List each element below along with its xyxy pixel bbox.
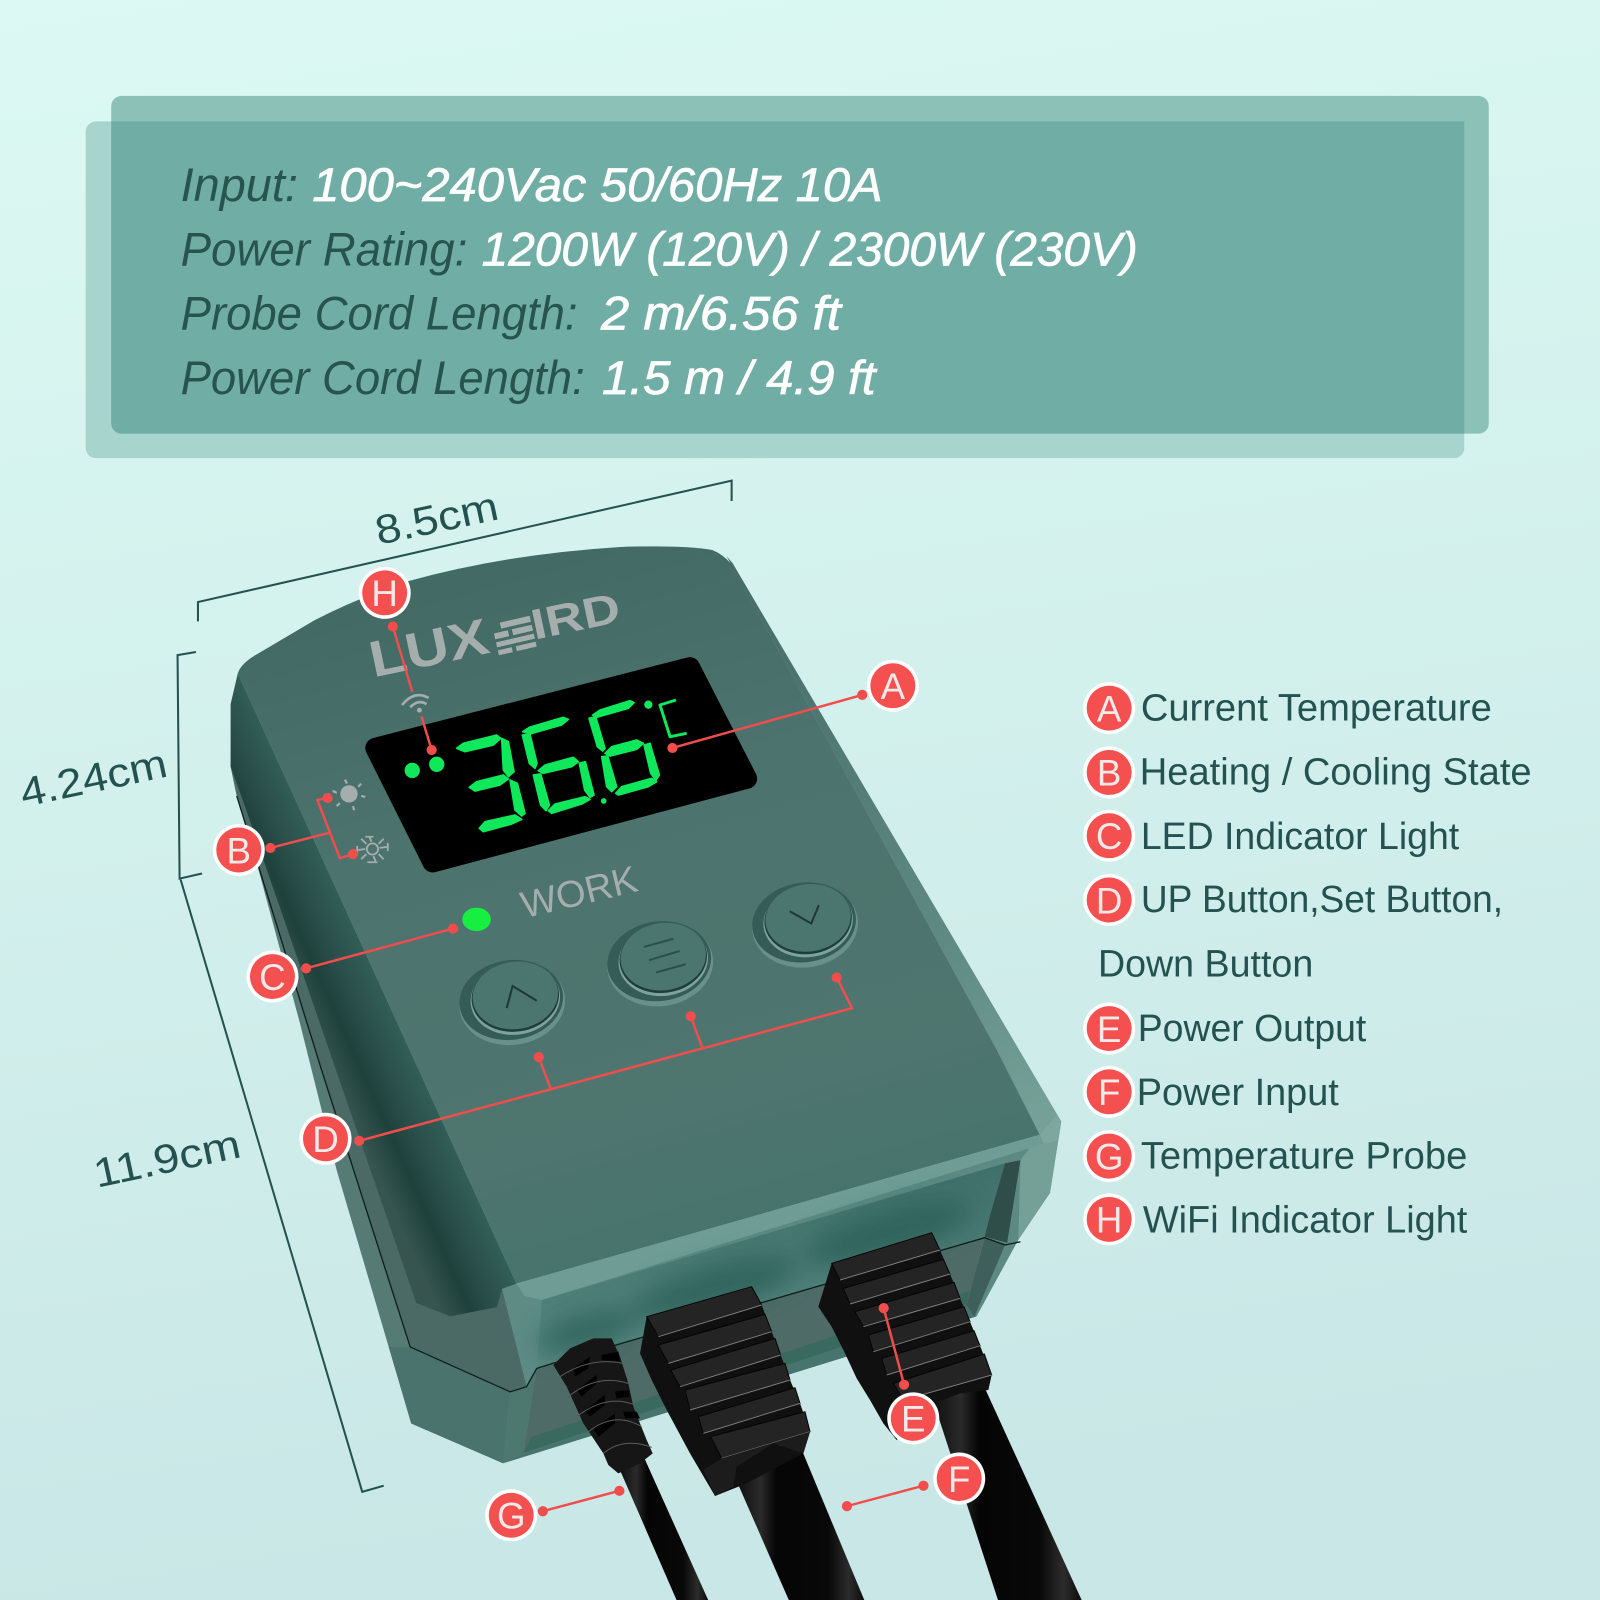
logo: LUX (364, 608, 494, 688)
legend item C: C (1096, 816, 1122, 857)
spec: probe cord length: Probe Cord Length: (181, 288, 578, 340)
legend item E: E (1097, 1009, 1121, 1050)
legend item A (1083, 682, 1492, 734)
callout H (359, 567, 437, 755)
button: down (747, 876, 863, 974)
dimension: length 11.9cm (89, 880, 384, 1492)
spec: power cord length (181, 352, 878, 404)
dimension: height 4.24cm: 4.24cm (16, 740, 171, 816)
spec: power rating: Power Rating: (181, 223, 467, 275)
legend item B: Heating / Cooling State (1140, 751, 1532, 793)
dimension: width 8.5cm (198, 481, 732, 621)
dimension: height 4.24cm (16, 652, 202, 879)
legend item G (1083, 1130, 1467, 1182)
callout C: C (259, 957, 286, 998)
legend item D: Down Button (1098, 943, 1313, 985)
plug: power input (640, 1287, 810, 1496)
callout D: D (312, 1119, 339, 1160)
callout E: E (901, 1399, 926, 1440)
spec: power cord length: 1.5 m / 4.9 ft (602, 352, 878, 404)
spec: probe cord length: 2 m/6.56 ft (600, 288, 843, 340)
legend item A: Current Temperature (1141, 686, 1492, 728)
body top face (238, 546, 1040, 1284)
spec: input: 100~240Vac 50/60Hz 10A (312, 159, 883, 211)
spec: probe cord length (181, 288, 843, 340)
icon: sun (333, 780, 365, 810)
callout D (299, 972, 852, 1165)
legend item B: B (1097, 753, 1121, 794)
legend item F: Power Input (1137, 1071, 1339, 1113)
plug shadows (533, 1187, 977, 1363)
indicator dots (405, 757, 444, 778)
housing seam (237, 796, 1020, 1392)
callout F: F (948, 1459, 970, 1500)
recess lower (523, 1237, 985, 1453)
callout B: B (227, 830, 251, 871)
logo: IRD (527, 584, 625, 650)
callout E (879, 1303, 939, 1444)
digits (457, 700, 687, 832)
body right side (727, 556, 1061, 1240)
legend item D: D (1096, 880, 1122, 921)
callout C (246, 923, 458, 1003)
callout G (485, 1486, 624, 1541)
body left groove (231, 673, 516, 1316)
label: WORK: WORK (517, 858, 641, 926)
body lower left (389, 1347, 510, 1463)
legend item H: WiFi Indicator Light (1143, 1199, 1468, 1241)
spec: input: Input: (181, 159, 298, 211)
legend item F (1083, 1066, 1339, 1118)
callout A: A (881, 666, 906, 707)
icon: wifi (402, 695, 429, 713)
body outer strip (231, 766, 510, 1463)
front recess (537, 1163, 1005, 1368)
LED indicator (462, 908, 491, 931)
legend item C: LED Indicator Light (1141, 815, 1460, 857)
legend item G: Temperature Probe (1141, 1134, 1467, 1176)
spec: power rating (181, 223, 1138, 275)
right slot (985, 1160, 1020, 1243)
display screen (376, 667, 747, 862)
legend (1083, 682, 1532, 1245)
dimension: width 8.5cm: 8.5cm (371, 483, 502, 554)
plug: power output (818, 1233, 992, 1440)
legend item C (1083, 810, 1460, 862)
legend item G: G (1095, 1136, 1123, 1177)
icon: snowflake (357, 837, 388, 862)
legend item F: F (1098, 1072, 1120, 1113)
spec: power rating: 1200W (120V) / 2300W (230V) (482, 223, 1138, 275)
legend item E (1083, 1003, 1367, 1055)
device body (231, 546, 1061, 1463)
spec: power cord length: Power Cord Length: (181, 352, 585, 404)
legend item B (1083, 746, 1532, 798)
legend item D (1083, 874, 1503, 985)
front edge highlight (516, 1135, 1044, 1300)
probe grommet (553, 1338, 653, 1473)
right corner highlight (1040, 1114, 1061, 1144)
legend item H: H (1096, 1200, 1122, 1241)
callout F (842, 1453, 985, 1511)
fins (832, 1233, 992, 1400)
logo (364, 584, 625, 688)
panel: specifications (86, 96, 1489, 458)
callout A (667, 660, 919, 753)
legend item A: A (1097, 688, 1122, 729)
legend item D: UP Button,Set Button, (1141, 878, 1503, 920)
legend item E: Power Output (1138, 1007, 1367, 1049)
callout B (213, 793, 358, 876)
body front shell (503, 1121, 1061, 1463)
callout G: G (497, 1496, 526, 1537)
cables (618, 1388, 1082, 1600)
button: up (454, 953, 571, 1052)
body left lip (231, 673, 542, 1392)
legend item H (1083, 1193, 1468, 1245)
fins (647, 1287, 810, 1496)
button: set (602, 915, 719, 1013)
dimension: length 11.9cm: 11.9cm (89, 1121, 245, 1197)
callout H: H (371, 573, 398, 614)
